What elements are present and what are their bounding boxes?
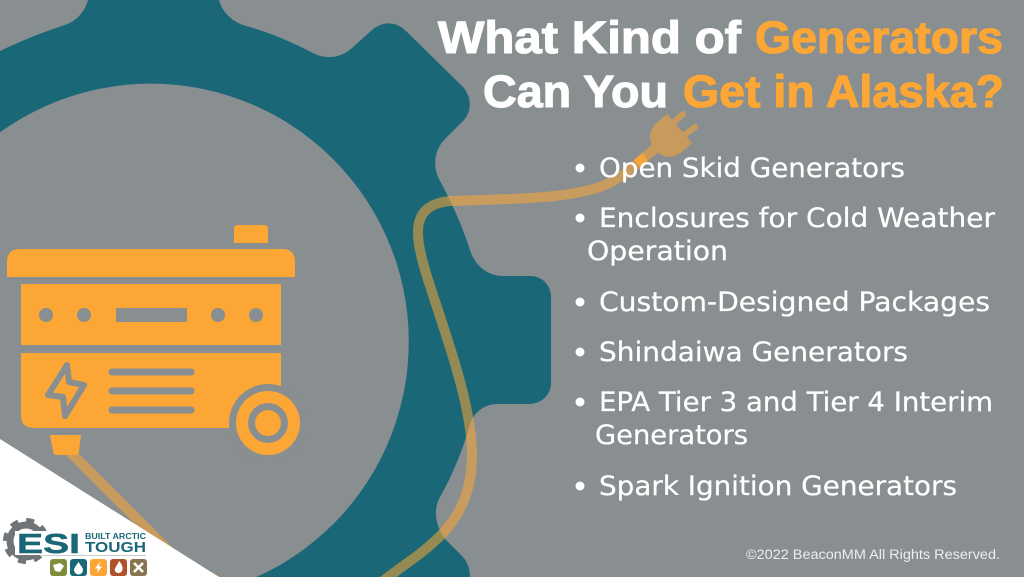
bullet: enclosures — [576, 203, 996, 267]
bullet: EPA — [576, 387, 993, 451]
white corner — [0, 439, 219, 577]
title: Get in Alaska? — [683, 66, 1004, 117]
logo — [6, 520, 147, 576]
bullet: EPA: EPA Tier 3 and Tier 4 Interim — [599, 387, 993, 418]
fuel cap — [234, 225, 268, 243]
bullet: open skid: Open Skid Generators — [599, 153, 905, 184]
control panel — [21, 284, 281, 345]
title — [438, 12, 1004, 117]
logo ESI wordmark: ESI — [17, 528, 80, 559]
lightning bolt — [48, 365, 84, 416]
logo service icons — [50, 559, 147, 576]
power cord and plug — [70, 114, 695, 577]
title: Generators — [755, 12, 1003, 63]
logo tagline bottom: TOUGH — [85, 539, 146, 556]
engine body — [21, 353, 281, 428]
logo gear — [6, 520, 51, 562]
title: What Kind of — [438, 12, 742, 63]
generator icon — [7, 225, 307, 462]
bullet: enclosures: Enclosures for Cold Weather — [599, 203, 996, 234]
copyright: ©2022 BeaconMM All Rights Reserved. — [746, 547, 1000, 562]
wheel — [229, 384, 307, 462]
bullet: custom: Custom-Designed Packages — [599, 287, 990, 318]
cord socket — [50, 435, 81, 455]
logo tagline top: BUILT ARCTIC — [85, 532, 146, 541]
generator top cover — [7, 249, 295, 277]
cord highlight — [634, 153, 648, 167]
gear centre circle — [0, 84, 409, 577]
bullet: spark: Spark Ignition Generators — [599, 471, 957, 502]
bullet: EPA: Generators — [595, 420, 748, 451]
gear shape — [0, 0, 551, 577]
title: Can You — [483, 66, 668, 117]
vent lines — [112, 372, 191, 410]
bullet list — [576, 153, 996, 502]
bullet: shindaiwa: Shindaiwa Generators — [599, 337, 908, 368]
bullet: enclosures: Operation — [587, 236, 728, 267]
